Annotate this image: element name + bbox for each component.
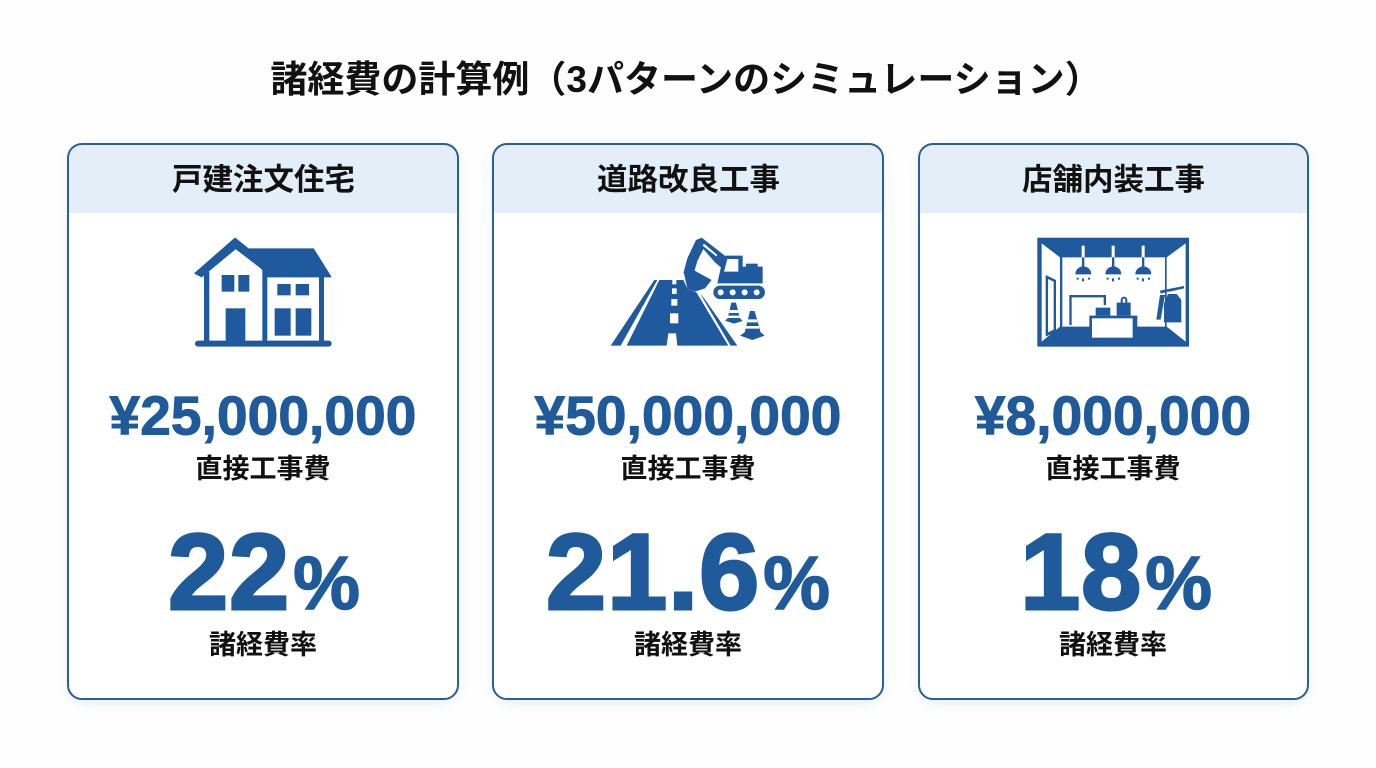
- icon: road and excavator: [611, 238, 765, 346]
- amount: ¥50,000,000: [535, 384, 841, 446]
- rate label: 諸経費率: [209, 630, 317, 660]
- panel: 道路改良工事: [493, 144, 883, 702]
- rate label: 諸経費率: [1059, 630, 1167, 660]
- rate label: 諸経費率: [634, 630, 742, 660]
- panel heading: 店舗内装工事: [1022, 163, 1205, 197]
- amount label: 直接工事費: [620, 454, 756, 484]
- panel: 店舗内装工事: [919, 144, 1308, 702]
- icon: house: [195, 238, 332, 347]
- icon: shop interior: [1037, 238, 1189, 347]
- amount: ¥8,000,000: [975, 384, 1251, 446]
- amount label: 直接工事費: [1046, 454, 1180, 484]
- rate: 22%: [168, 511, 360, 632]
- rate: 21.6%: [546, 511, 830, 632]
- amount: ¥25,000,000: [110, 384, 416, 446]
- panel: 戸建注文住宅: [68, 144, 458, 702]
- panel heading: 戸建注文住宅: [172, 163, 355, 197]
- rate: 18%: [1020, 511, 1212, 632]
- title: 諸経費の計算例（3パターンのシミュレーション）: [270, 59, 1102, 100]
- amount label: 直接工事費: [196, 454, 330, 484]
- panel heading: 道路改良工事: [597, 163, 780, 197]
